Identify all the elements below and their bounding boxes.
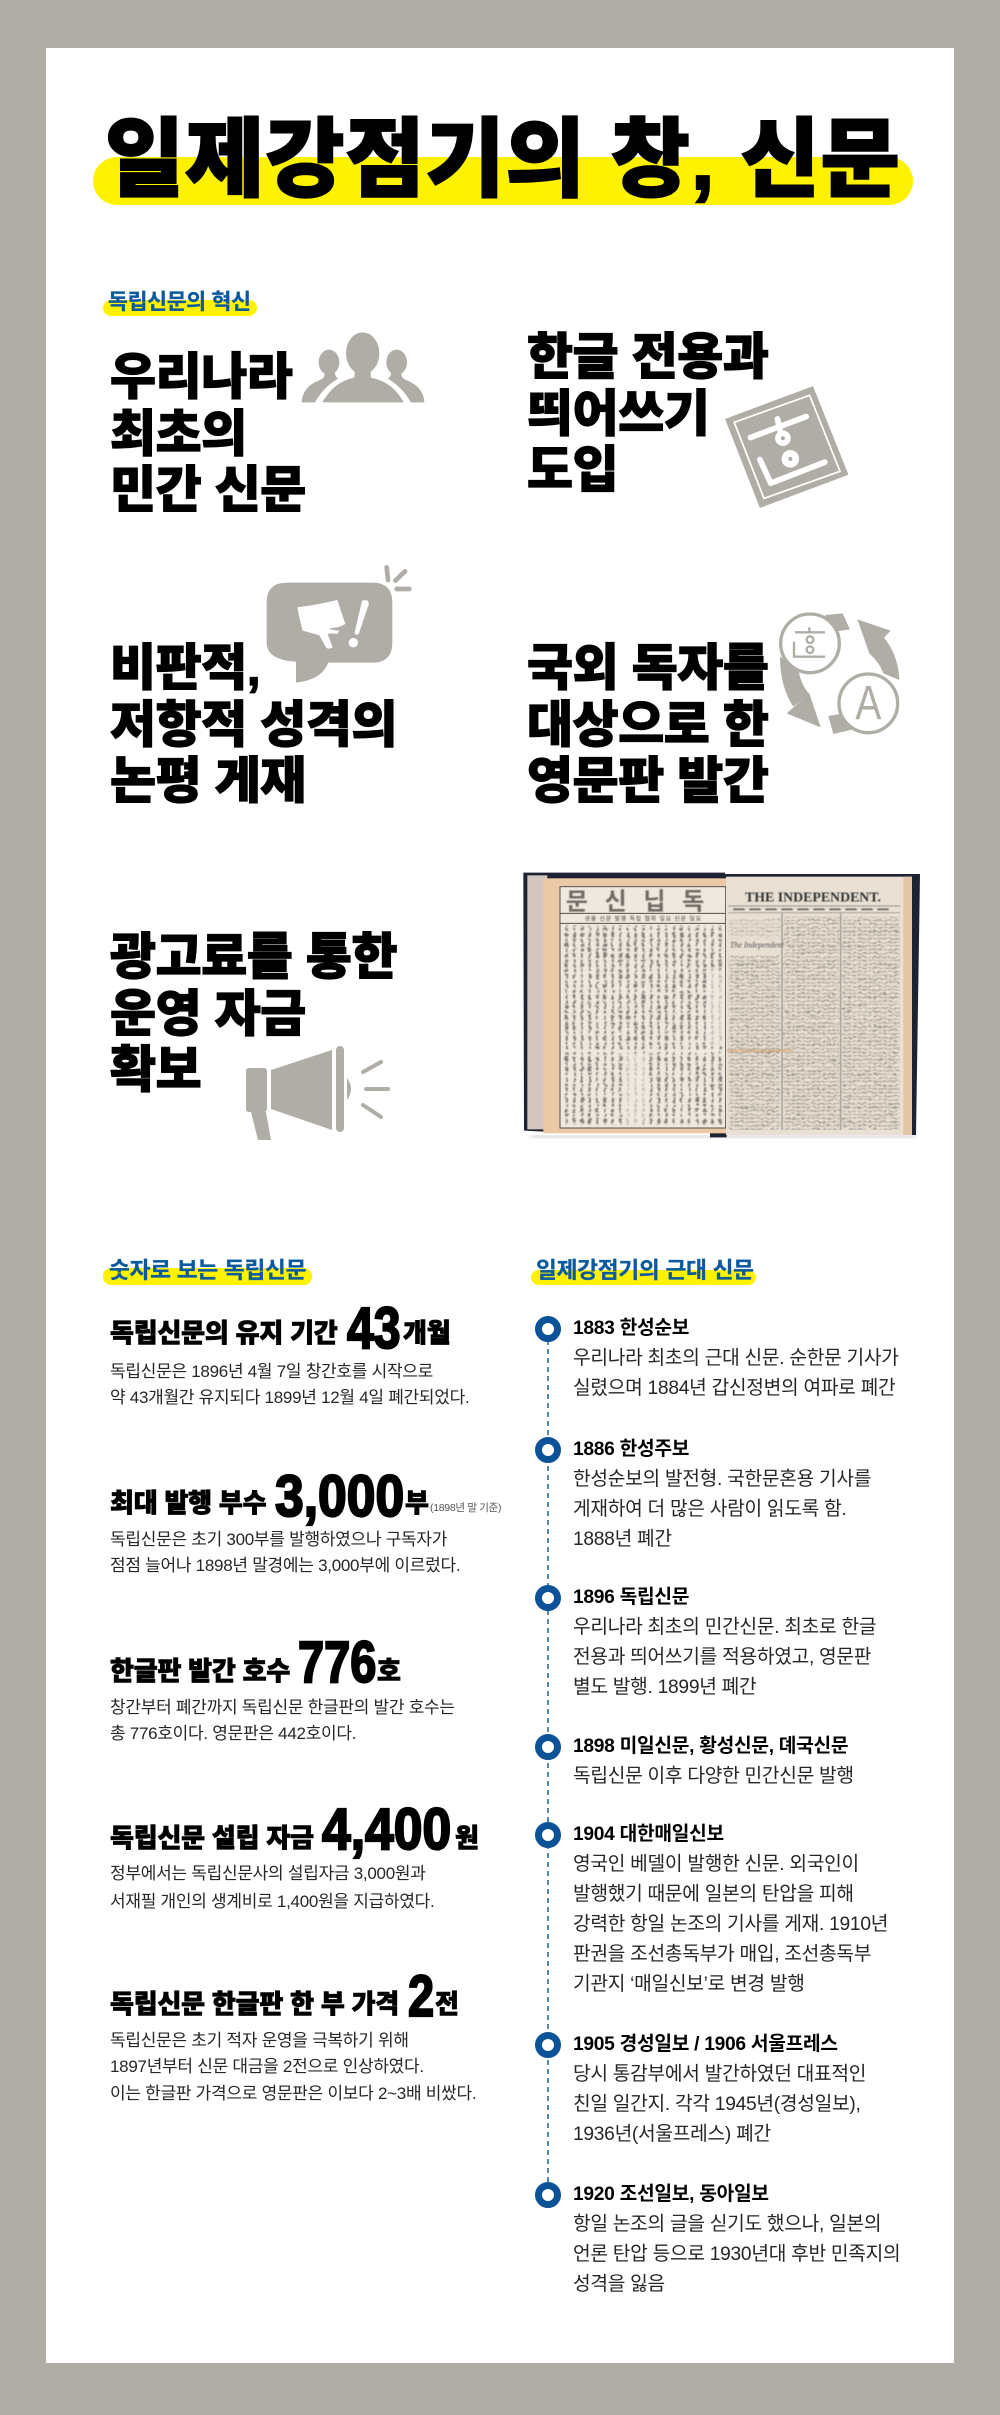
feature: advertising revenue: 운영 자금 xyxy=(110,986,306,1042)
stat label: 독립신문 한글판 한 부 가격 xyxy=(110,1989,399,2019)
photo: bound newspaper: The Independent xyxy=(730,940,784,949)
stat: korean issues 776 xyxy=(110,1630,455,1743)
feature: critical editorials: 저항적 성격의 xyxy=(110,696,397,752)
heading highlight xyxy=(103,300,257,316)
stat description xyxy=(110,2031,476,2103)
stat description xyxy=(110,1698,455,1743)
feature: english edition: 대상으로 한 xyxy=(527,696,768,752)
heading: innovation xyxy=(103,289,257,316)
entry text: 판권을 조선총독부가 매입, 조선총독부 xyxy=(573,1944,871,1965)
feature: first private newspaper: 최초의 xyxy=(110,406,247,462)
stat number: 43 xyxy=(347,1296,401,1360)
cover xyxy=(523,873,920,1137)
entry text xyxy=(573,1736,854,1787)
entry text: 1888년 폐간 xyxy=(573,1529,672,1550)
feature: first private newspaper: 우리나라 xyxy=(110,349,292,405)
entry text: 독립신문 이후 다양한 민간신문 발행 xyxy=(573,1766,854,1787)
photo: bound newspaper: THE INDEPENDENT. xyxy=(745,889,881,904)
stat description: 정부에서는 독립신문사의 설립자금 3,000원과 xyxy=(110,1864,426,1883)
feature: hangul and spacing: 띄어쓰기 xyxy=(527,386,709,442)
stat description: 점점 늘어나 1898년 말경에는 3,000부에 이르렀다. xyxy=(110,1556,460,1575)
stat label: 한글판 발간 호수 xyxy=(110,1656,290,1686)
entry text: 1905 경성일보 / 1906 서울프레스 xyxy=(573,2034,838,2055)
left page xyxy=(543,878,726,1133)
stat unit: 전 xyxy=(435,1989,459,2019)
icon: speech bubble with thumbs down xyxy=(266,565,412,683)
timeline marker xyxy=(535,2032,561,2058)
stat description: 독립신문은 초기 적자 운영을 극복하기 위해 xyxy=(110,2031,409,2050)
timeline marker xyxy=(535,1585,561,1611)
timeline entry: 1883 xyxy=(535,1316,899,1399)
entry text: 1886 한성주보 xyxy=(573,1439,689,1460)
icon: translation arrows: A xyxy=(855,676,882,730)
heading highlight xyxy=(531,1270,756,1285)
stat unit: 개월 xyxy=(403,1318,450,1348)
entry text: 1883 한성순보 xyxy=(573,1318,689,1339)
heading text: 독립신문의 혁신 xyxy=(108,289,251,314)
stat number: 3,000 xyxy=(275,1464,404,1529)
feature: english edition: 영문판 발간 xyxy=(527,753,768,809)
photo: bound newspaper: 문신닙독 xyxy=(566,888,721,915)
stat label: 최대 발행 부수 xyxy=(110,1488,266,1518)
stat: price 2 jeon xyxy=(110,1964,476,2103)
stat description xyxy=(110,1530,460,1575)
entry text: 1904 대한매일신보 xyxy=(573,1824,724,1845)
stat number: 2 xyxy=(408,1964,434,2028)
right page xyxy=(726,877,912,1135)
entry text: 영국인 베델이 발행한 신문. 외국인이 xyxy=(573,1854,859,1875)
entry text xyxy=(573,2184,900,2295)
feature: hangul and spacing: 한글 전용과 xyxy=(527,329,768,385)
feature: hangul and spacing xyxy=(527,329,768,498)
feature: critical editorials: 논평 게재 xyxy=(110,753,306,809)
stat description: 서재필 개인의 생계비로 1,400원을 지급하였다. xyxy=(110,1892,434,1911)
entry text: 기관지 ‘매일신보’로 변경 발행 xyxy=(573,1974,805,1995)
stat description xyxy=(110,1864,434,1911)
timeline marker xyxy=(535,1734,561,1760)
entry text: 당시 통감부에서 발간하였던 대표적인 xyxy=(573,2064,866,2085)
entry text: 성격을 잃음 xyxy=(573,2274,665,2295)
entry text: 친일 일간지. 각각 1945년(경성일보), xyxy=(573,2094,861,2115)
photo: bound newspaper xyxy=(523,872,920,1138)
feature: advertising revenue: 확보 xyxy=(110,1042,201,1098)
heading: by the numbers xyxy=(103,1257,312,1285)
entry text: 강력한 항일 논조의 기사를 게재. 1910년 xyxy=(573,1914,888,1935)
icon: translation arrows xyxy=(779,612,900,734)
stat unit: 원 xyxy=(455,1823,479,1853)
timeline entry: 1905 xyxy=(535,2032,866,2145)
heading text: 숫자로 보는 독립신문 xyxy=(109,1257,306,1283)
stat footnote: (1898년 말 기준) xyxy=(430,1502,501,1514)
stat number: 776 xyxy=(298,1630,376,1695)
entry text: 1898 미일신문, 황성신문, 뎨국신문 xyxy=(573,1736,848,1757)
timeline entry: 1898 xyxy=(535,1734,854,1787)
entry text: 항일 논조의 글을 싣기도 했으나, 일본의 xyxy=(573,2214,881,2235)
entry text: 우리나라 최초의 근대 신문. 순한문 기사가 xyxy=(573,1348,899,1369)
stat description: 창간부터 폐간까지 독립신문 한글판의 발간 호수는 xyxy=(110,1698,455,1717)
feature: critical editorials xyxy=(110,640,397,809)
title highlight xyxy=(93,157,913,205)
feature: first private newspaper xyxy=(110,349,306,518)
stat description: 1897년부터 신문 대금을 2전으로 인상하였다. xyxy=(110,2057,424,2076)
feature: english edition xyxy=(527,640,768,809)
feature: first private newspaper: 민간 신문 xyxy=(110,462,306,518)
entry text: 게재하여 더 많은 사람이 읽도록 함. xyxy=(573,1499,847,1520)
timeline marker xyxy=(535,1316,561,1342)
timeline marker xyxy=(535,1437,561,1463)
timeline connector xyxy=(547,1342,549,2182)
title text: 일제강점기의 창, 신문 xyxy=(105,112,901,208)
stat label: 독립신문 설립 자금 xyxy=(110,1823,314,1853)
entry text xyxy=(573,1824,888,1995)
heading: modern newspapers xyxy=(531,1257,756,1285)
entry text: 전용과 띄어쓰기를 적용하였고, 영문판 xyxy=(573,1647,871,1668)
feature: critical editorials: 비판적, xyxy=(110,640,260,696)
stat number: 4,400 xyxy=(322,1797,451,1862)
entry text xyxy=(573,1586,876,1698)
stat: max circulation 3000 xyxy=(110,1464,501,1575)
feature: advertising revenue xyxy=(110,929,397,1098)
stat: founding funds 4400 xyxy=(110,1797,479,1911)
title xyxy=(93,112,913,208)
icon: megaphone xyxy=(246,1046,390,1140)
icon: hangul stamp xyxy=(725,386,848,508)
timeline marker xyxy=(535,2182,561,2208)
icon: people xyxy=(302,332,424,402)
entry text xyxy=(573,1318,899,1399)
timeline marker xyxy=(535,1822,561,1848)
entry text: 우리나라 최초의 민간신문. 최초로 한글 xyxy=(573,1617,876,1638)
timeline entry: 1886 xyxy=(535,1437,871,1550)
stat: duration 43 months xyxy=(110,1296,469,1407)
entry text: 별도 발행. 1899년 폐간 xyxy=(573,1677,756,1698)
entry text: 언론 탄압 등으로 1930년대 후반 민족지의 xyxy=(573,2244,900,2265)
stat description: 총 776호이다. 영문판은 442호이다. xyxy=(110,1724,356,1743)
entry text: 1936년(서울프레스) 폐간 xyxy=(573,2124,771,2145)
stat unit: 호 xyxy=(377,1656,401,1686)
timeline entry: 1896 xyxy=(535,1585,876,1698)
stat label: 독립신문의 유지 기간 xyxy=(110,1318,338,1348)
heading text: 일제강점기의 근대 신문 xyxy=(536,1257,754,1283)
entry text: 한성순보의 발전형. 국한문혼용 기사를 xyxy=(573,1469,871,1490)
heading highlight xyxy=(103,1268,312,1285)
feature: advertising revenue: 광고료를 통한 xyxy=(110,929,397,985)
entry text xyxy=(573,2034,866,2145)
stat description: 독립신문은 1896년 4월 7일 창간호를 시작으로 xyxy=(110,1362,433,1381)
entry text: 실렸으며 1884년 갑신정변의 여파로 폐간 xyxy=(573,1378,895,1399)
feature: hangul and spacing: 도입 xyxy=(527,442,618,498)
stat unit: 부 xyxy=(405,1488,429,1518)
entry text: 1920 조선일보, 동아일보 xyxy=(573,2184,769,2205)
stat description xyxy=(110,1362,469,1407)
entry text: 발행했기 때문에 일본의 탄압을 피해 xyxy=(573,1884,854,1905)
photo: bound newspaper: 셩울 신문 발행 독립 협회 일요 신문 일요 xyxy=(585,915,702,923)
timeline entry: 1904 xyxy=(535,1822,888,1995)
entry text: 1896 독립신문 xyxy=(573,1587,689,1608)
feature: english edition: 국외 독자를 xyxy=(527,640,768,696)
stat description: 독립신문은 초기 300부를 발행하였으나 구독자가 xyxy=(110,1530,447,1549)
stat description: 이는 한글판 가격으로 영문판은 이보다 2~3배 비쌌다. xyxy=(110,2084,476,2103)
entry text xyxy=(573,1438,871,1550)
stat description: 약 43개월간 유지되다 1899년 12월 4일 폐간되었다. xyxy=(110,1388,469,1407)
timeline entry: 1920 xyxy=(535,2182,900,2295)
